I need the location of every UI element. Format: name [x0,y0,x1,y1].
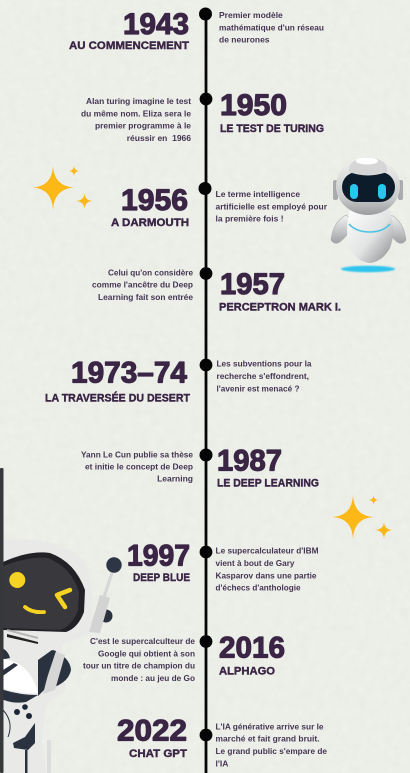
description 1987: Learning [157,474,193,484]
description 2016: monde : au jeu de Go [111,673,195,683]
description 2022 [216,721,327,768]
description 1956 [216,189,328,224]
entry: 1950 [81,89,324,143]
illustration: winking robot peeking from edge [0,539,122,773]
description 2016: Google qui obtient à son [98,648,195,658]
year 1950: 1950 [220,89,287,122]
robot open eye [9,572,25,588]
description 1956: artificielle est employé pour [216,201,328,211]
description 1997 [216,546,318,593]
description 1973-74: Les subventions pour la [216,359,312,369]
robot shoulder [38,650,71,696]
robot collar [7,629,38,644]
illustration: white hovering robot [331,157,406,272]
year 2022: 2022 [117,715,187,748]
year 1957: 1957 [220,268,285,301]
description 2022: marché et fait grand bruit. [216,734,320,744]
description 2022: L'IA générative arrive sur le [216,721,324,731]
description 1950: du même nom. Eliza sera le [81,108,191,118]
year 1956: 1956 [121,184,188,217]
entry: 1973-74 [45,357,312,404]
heading: a darmouth: A DARMOUTH [111,217,189,229]
description 1973-74: recherche s'effondrent, [216,371,309,381]
entry: 1957 [92,267,341,314]
robot smile [25,607,44,612]
year 1987: 1987 [217,445,282,478]
central timeline axis [205,14,207,773]
entry: 1987 [81,445,319,490]
entry: 1943 [69,8,324,52]
heading: deep blue: DEEP BLUE [133,572,190,584]
description 1950: réussir en 1966 [127,133,191,143]
description 1997: d'échecs d'anthologie [216,583,301,593]
entry: 1956 [111,184,328,229]
description 1973-74: l'avenir est menacé ? [216,383,300,393]
icon: gold sparkles right [332,495,392,539]
description 1987: Yann Le Cun publie sa thèse [81,449,193,459]
description 2016: C'est le supercalculteur de [90,636,195,646]
description 1957: comme l'ancêtre du Deep [92,280,193,290]
description 1987 [81,449,193,484]
year 2016: 2016 [219,631,285,664]
year 1997: 1997 [127,539,190,572]
description 1950: Alan turing imagine le test [86,96,191,106]
description 2022: Le grand public s'empare de [216,746,327,756]
description 1943: Premier modèle [219,10,283,20]
robot visor [3,552,85,632]
dark door frame edge [0,468,4,773]
description 1956: Le terme intelligence [216,189,300,199]
description 1997: Kasparov dans une partie [216,570,317,580]
robot shadow [341,266,395,272]
heading: chat gpt: CHAT GPT [129,748,187,760]
heading: perceptron mark I: PERCEPTRON MARK I. [219,302,341,314]
robot belt [349,224,390,232]
entry: 2016 [83,631,285,683]
description 2016: tour un titre de champion du [83,661,195,671]
robot leg [13,723,51,773]
year 1973-74: 1973–74 [71,357,187,390]
description 1943 [219,10,324,45]
robot body [347,206,393,263]
heading: le test de turing: LE TEST DE TURING [220,123,324,135]
heading: alphago: ALPHAGO [219,665,275,677]
heading: au commencement: AU COMMENCEMENT [69,40,189,52]
description 1997: vient à bout de Gary [216,558,295,568]
entry: 1997 [127,539,318,593]
robot antenna [89,557,122,633]
robot chest buttons [3,704,32,737]
description 1957: Celui qu'on considère [108,267,193,277]
icon: gold sparkles left [33,166,92,210]
robot arm [0,647,38,703]
robot arms [331,215,406,243]
robot head [336,157,400,215]
description 1957 [92,267,193,302]
year 1943: 1943 [123,8,189,41]
robot visor [342,172,395,202]
description 1957: Learning fait son entrée [98,292,193,302]
description 1956: la première fois ! [216,214,284,224]
description 2022: l'IA [216,758,228,768]
robot helmet and torso [0,539,93,773]
description 1973-74 [216,359,312,393]
heading: la traversee du desert: LA TRAVERSÉE DU DESERT [45,391,190,404]
description 1997: Le supercalculateur d'IBM [216,546,318,556]
timeline dots [198,8,212,741]
heading: le deep learning: LE DEEP LEARNING [217,478,319,490]
robot ears [333,180,403,200]
robot eyes [350,184,386,199]
description 1987: et initie le concept de Deep [85,462,193,472]
description 1950: premier programme à le [95,121,191,131]
description 2016 [83,636,195,683]
robot winking eye [57,590,70,607]
entry: 2022 [117,715,327,768]
description 1943: de neurones [219,35,270,45]
description 1943: mathématique d'un réseau [219,22,324,32]
robot cap [349,157,387,176]
description 1950 [81,96,191,143]
